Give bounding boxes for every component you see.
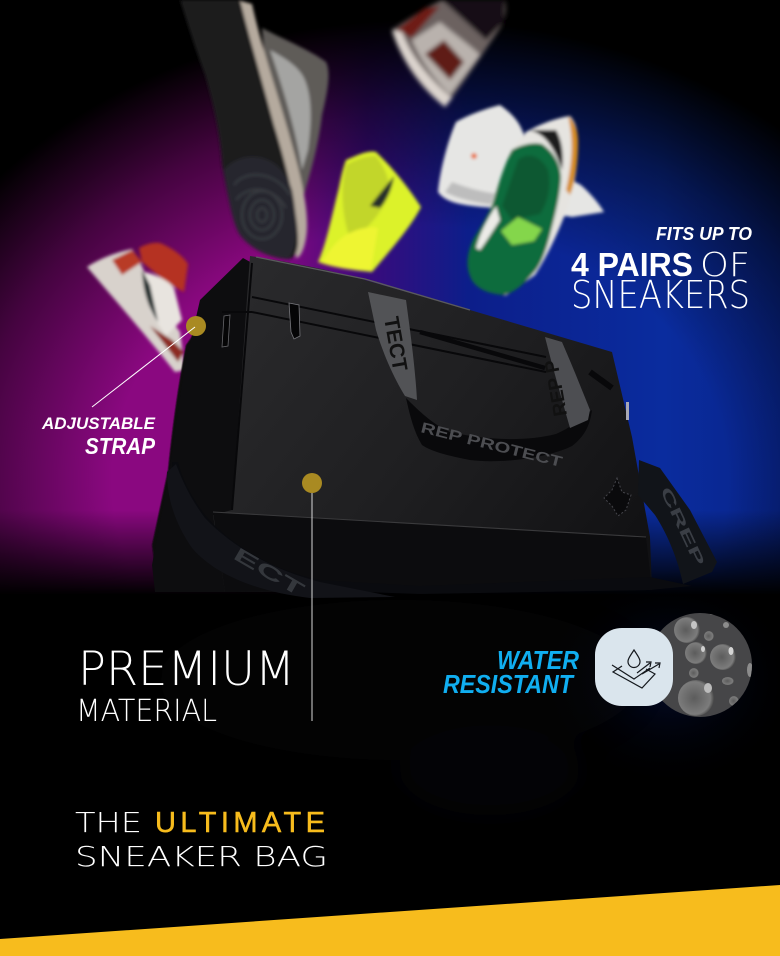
sneaker: large black sole, top centre [180,0,329,259]
bag seams and zips [213,263,646,537]
bag top edge highlight [256,257,470,310]
left handle strap: TECT [379,315,411,373]
heading: fits up to 4 pairs of sneakers [571,224,752,317]
right shoulder strap: CREP [656,485,708,569]
bag side panel [152,258,252,592]
sneaker: green sole [467,116,578,296]
bag body [213,256,652,592]
front shoulder strap: ECT [230,544,308,602]
heading: fits up to 4 pairs of sneakers: OF [700,245,750,284]
zipper pulls [289,303,300,339]
label: water resistant [443,645,579,699]
sneaker: neon yellow [318,152,421,272]
heading: fits up to 4 pairs of sneakers: SNEAKERS [571,273,750,317]
label: water resistant: RESISTANT [443,669,575,699]
right shoulder strap [638,460,717,584]
label: adjustable strap: STRAP [85,433,156,459]
sneaker: white, behind green sole [438,105,604,217]
bag side tag [626,402,629,420]
handle printed text: REP PROTECT [419,419,564,471]
heading: fits up to 4 pairs of sneakers: 4 PAIRS [571,246,693,283]
label: premium material: PREMIUM [78,642,295,697]
label: adjustable strap [41,414,156,459]
label: premium material [76,642,295,729]
tagline: the ultimate sneaker bag: SNEAKER BAG [75,840,328,873]
callout: adjustable strap marker [92,316,206,407]
right handle strap: REP P [541,358,572,418]
front shoulder strap [167,462,692,602]
heading: fits up to 4 pairs of sneakers: FITS UP TO [656,224,752,244]
callout: premium material marker [302,473,322,721]
tagline: the ultimate sneaker bag: ULTIMATE [155,807,325,839]
left handle strap [368,292,417,400]
bag reflection on floor [160,600,640,815]
handle, lower band [406,398,592,461]
label: water resistant: WATER [497,645,579,675]
bag shoulder strap, back left [152,325,212,590]
label: adjustable strap: ADJUSTABLE [41,414,156,433]
tagline: the ultimate sneaker bag [75,806,328,873]
water droplets photo [660,613,752,717]
sneaker: red and white, top right [392,0,506,107]
tagline: the ultimate sneaker bag: THE [75,806,142,839]
right handle strap [541,337,590,428]
icon: water resistant badge [595,628,673,706]
duffel bag [152,256,717,602]
label: premium material: MATERIAL [76,694,217,729]
bag logo [604,478,631,516]
yellow footer band [0,885,780,956]
bag bottom panel [213,512,652,592]
sneaker: red and white, left of bag [87,243,188,372]
